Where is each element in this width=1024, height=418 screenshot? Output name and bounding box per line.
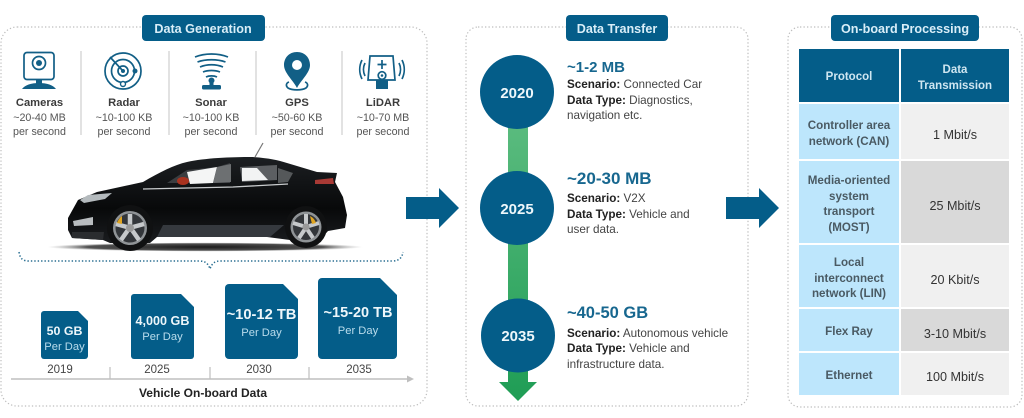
front wheel — [107, 205, 153, 251]
file: 2025: 4,000 GB — [136, 314, 189, 328]
text: 2035 data: Data Type: Vehicle and — [567, 342, 690, 355]
text: 2020 data: navigation etc. — [567, 109, 642, 122]
text: 2035 data: ~40-50 GB — [567, 304, 648, 322]
row: lin — [799, 245, 1009, 307]
arrow: generation to transfer — [406, 188, 459, 228]
text: 2035 data — [567, 304, 728, 371]
row: flex ray: Flex Ray — [825, 325, 873, 338]
text: 2020 data: Data Type: Diagnostics, — [567, 94, 693, 107]
file: 2019: 50 GB — [47, 324, 82, 338]
text: 2020 data: ~1-2 MB — [567, 59, 625, 76]
car image — [47, 143, 363, 252]
row: can: network (CAN) — [809, 135, 889, 148]
row: flex ray: 3-10 Mbit/s — [924, 327, 986, 341]
sensor: radar — [96, 97, 152, 138]
text: 2025 data: user data. — [567, 223, 619, 236]
sensor: gps: GPS — [285, 97, 309, 109]
axis title: Vehicle On-board Data — [139, 386, 267, 400]
node: 2025: 2025 — [500, 201, 534, 218]
row: most: Media-oriented — [808, 174, 890, 187]
node: 2020 — [480, 55, 554, 129]
row: most — [799, 161, 1009, 243]
table header — [799, 49, 1009, 102]
sensor: gps: ~50-60 KB — [272, 112, 322, 124]
sensor: lidar: LiDAR — [366, 97, 400, 109]
icon: lidar — [360, 56, 404, 89]
file: 2025 — [131, 294, 194, 359]
brace — [19, 252, 403, 269]
axis years: 2030 — [246, 364, 272, 376]
sensor: lidar: ~10-70 MB — [357, 112, 409, 124]
node: 2020: 2020 — [500, 85, 534, 102]
row: ethernet — [799, 353, 1009, 395]
icon: radar — [105, 53, 141, 89]
axis years: 2019 — [47, 364, 73, 376]
file: 2035: ~15-20 TB — [324, 305, 392, 321]
sensor: sonar: ~10-100 KB — [183, 112, 239, 124]
text: 2025 data — [567, 169, 690, 236]
panel: on-board processing — [788, 15, 1022, 407]
icon: camera — [22, 52, 56, 89]
timeline axis — [11, 367, 414, 382]
node: 2035: 2035 — [501, 328, 535, 345]
sensor: radar: per second — [98, 126, 150, 138]
file: 2035 — [318, 278, 397, 359]
sensor: gps — [271, 97, 323, 138]
sensor: radar: Radar — [108, 97, 140, 109]
file: 2030: ~10-12 TB — [227, 307, 296, 323]
axis years: 2025 — [144, 364, 170, 376]
node: 2025 — [480, 171, 554, 245]
icon: gps pin — [284, 52, 310, 90]
heading: data transfer — [566, 15, 668, 41]
sensor: lidar — [357, 97, 409, 138]
file: 2025: Per Day — [142, 331, 183, 343]
sensor: sonar: Sonar — [195, 97, 227, 109]
text: 2035 data: infrastructure data. — [567, 358, 664, 371]
file: 2030 — [225, 284, 298, 359]
sensor: sonar: per second — [185, 126, 237, 138]
sensor: cameras — [13, 97, 66, 138]
sensor: gps: per second — [271, 126, 323, 138]
sensor: cameras: per second — [13, 126, 66, 138]
row: most: system — [829, 190, 869, 203]
row: most: 25 Mbit/s — [929, 199, 981, 213]
heading: on-board processing: On-board Processing — [841, 22, 969, 36]
row: lin: interconnect — [814, 272, 884, 285]
text: 2035 data: Scenario: Autonomous vehicle — [567, 327, 728, 340]
divider group — [81, 51, 342, 135]
rear wheel — [285, 206, 327, 248]
sensor: cameras: ~20-40 MB — [13, 112, 66, 124]
heading: on-board processing — [831, 15, 979, 41]
row: ethernet: 100 Mbit/s — [926, 370, 984, 384]
row: can: Controller area — [808, 119, 891, 132]
panel: data transfer — [466, 15, 748, 406]
row: ethernet: Ethernet — [825, 369, 873, 382]
row: most: transport — [824, 205, 875, 218]
row: lin: Local — [834, 256, 864, 269]
heading: data generation — [142, 15, 265, 41]
row: most: (MOST) — [828, 221, 870, 234]
text: 2025 data: Data Type: Vehicle and — [567, 208, 690, 221]
sensor: lidar: per second — [357, 126, 409, 138]
heading: data transfer: Data Transfer — [577, 22, 657, 36]
row: lin: network (LIN) — [812, 287, 886, 300]
row: lin: 20 Kbit/s — [930, 273, 980, 287]
arrow: transfer to processing — [726, 188, 779, 228]
row: can: 1 Mbit/s — [933, 128, 977, 142]
panel: data generation — [1, 15, 427, 406]
row: flex ray — [799, 309, 1009, 351]
table — [799, 49, 1009, 395]
heading: data generation: Data Generation — [154, 22, 252, 36]
text: 2020 data — [567, 59, 702, 122]
table header: Transmission — [918, 80, 992, 92]
file: 2035: Per Day — [338, 325, 379, 337]
timeline arrow — [499, 125, 537, 401]
file: 2030: Per Day — [241, 327, 282, 339]
text: 2020 data: Scenario: Connected Car — [567, 78, 702, 91]
sensor: cameras: Cameras — [16, 97, 63, 109]
text: 2025 data: ~20-30 MB — [567, 169, 652, 188]
icon: sonar — [195, 54, 228, 90]
row: can — [799, 104, 1009, 159]
sensor: radar: ~10-100 KB — [96, 112, 152, 124]
table header: Protocol — [826, 71, 872, 83]
text: 2025 data: Scenario: V2X — [567, 192, 646, 205]
sensor: sonar — [183, 97, 239, 138]
file: 2019 — [41, 311, 88, 359]
table header: Data — [943, 64, 968, 76]
axis years: 2035 — [346, 364, 372, 376]
axis years — [47, 364, 372, 376]
file: 2019: Per Day — [44, 341, 85, 353]
node: 2035 — [481, 298, 555, 372]
